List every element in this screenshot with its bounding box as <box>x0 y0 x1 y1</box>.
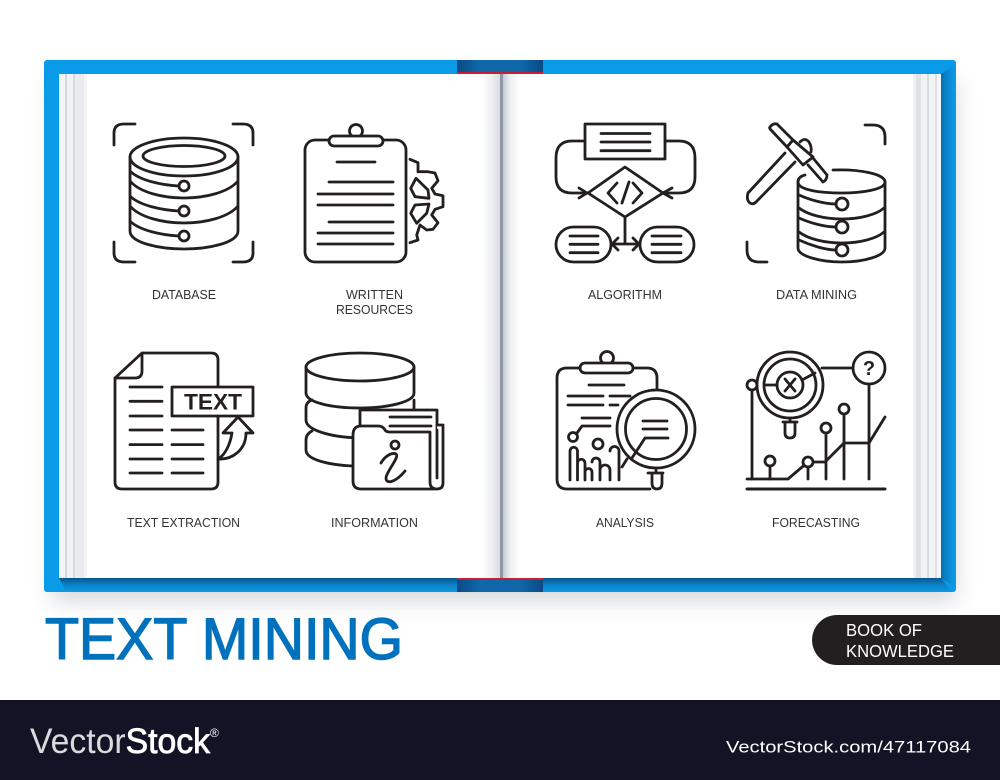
icon: information <box>306 353 443 489</box>
book <box>44 60 956 602</box>
footer logo: VectorStock <box>30 722 210 761</box>
icon: forecasting: ? <box>863 358 875 380</box>
left page edges <box>59 74 87 578</box>
right page edges <box>913 74 941 578</box>
label: text extraction: TEXT EXTRACTION <box>127 515 240 530</box>
label: written resources: RESOURCES <box>336 302 413 317</box>
label: forecasting: FORECASTING <box>772 515 860 530</box>
cover right inner edge <box>941 64 956 588</box>
icon: written resources <box>305 124 443 262</box>
label: database: DATABASE <box>152 287 216 302</box>
footer image id: VectorStock.com/47117084 <box>726 738 971 756</box>
cover bottom inner edge <box>59 578 952 592</box>
footer bar <box>0 700 1000 780</box>
spine tab bottom <box>457 578 543 592</box>
icon: database <box>114 124 253 262</box>
footer registered mark: ® <box>210 726 219 740</box>
label: information: INFORMATION <box>331 515 418 530</box>
icon: analysis <box>557 352 695 489</box>
badge: book of knowledge <box>812 615 1000 665</box>
label: analysis: ANALYSIS <box>596 515 654 530</box>
icon: text extraction: TEXT <box>184 390 243 414</box>
icon: algorithm <box>556 124 695 262</box>
spine tab top <box>457 60 543 74</box>
icon: text extraction <box>115 353 253 489</box>
label: written resources <box>336 287 413 317</box>
icon: data mining <box>747 124 885 262</box>
pages <box>59 74 941 578</box>
label: data mining: DATA MINING <box>776 287 857 302</box>
badge: book of knowledge: KNOWLEDGE <box>846 641 954 661</box>
icon: forecasting <box>747 352 885 489</box>
spine shadow <box>482 74 520 578</box>
label: algorithm: ALGORITHM <box>588 287 662 302</box>
title: TEXT MINING <box>45 607 403 672</box>
label: written resources: WRITTEN <box>346 287 403 302</box>
book cover <box>44 60 956 592</box>
badge: book of knowledge: BOOK OF <box>846 620 922 640</box>
